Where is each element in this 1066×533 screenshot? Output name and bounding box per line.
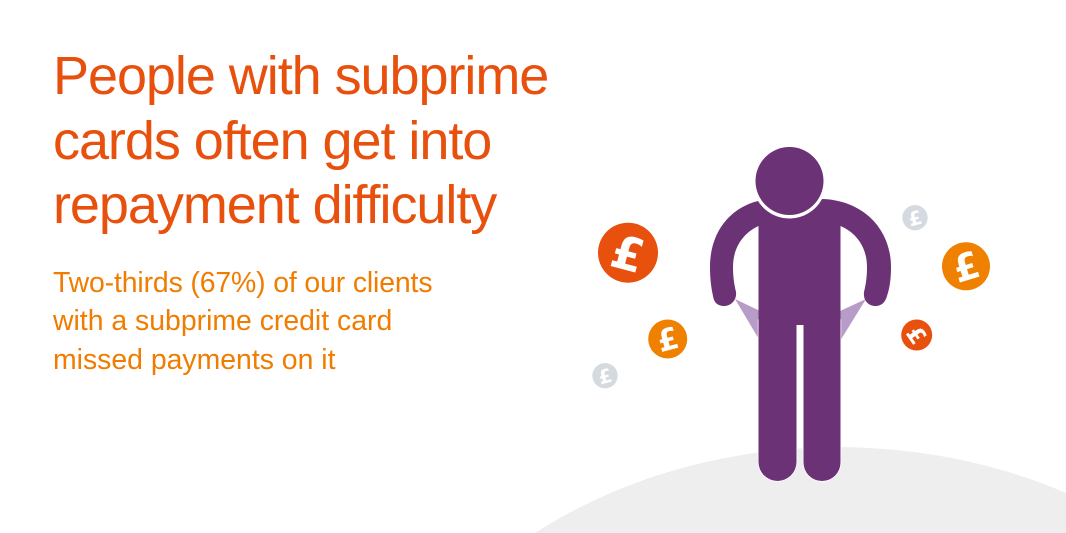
icon: empty right pocket xyxy=(840,299,866,341)
title: cards often get into xyxy=(53,110,491,170)
head xyxy=(756,147,824,215)
torso and arms xyxy=(710,199,891,325)
ground xyxy=(535,447,1066,533)
title: People with subprime xyxy=(53,46,548,106)
coin: small orange left: £ xyxy=(653,321,683,360)
coin: grey upper right xyxy=(902,205,928,231)
title xyxy=(53,46,548,235)
title: repayment difficulty xyxy=(53,175,496,235)
left leg xyxy=(758,320,796,481)
subtitle text xyxy=(53,266,432,376)
coin: large red: £ xyxy=(605,224,650,284)
coin: small red rotated: £ xyxy=(900,322,931,350)
right leg xyxy=(804,320,840,481)
coin: orange right: £ xyxy=(948,243,985,292)
coin: grey lower left xyxy=(592,363,618,389)
subtitle text: missed payments on it xyxy=(53,344,335,376)
figure: man xyxy=(710,147,891,481)
icon: empty left pocket xyxy=(735,299,760,341)
subtitle text: with a subprime credit card xyxy=(53,305,392,337)
coin: grey upper right: £ xyxy=(906,207,925,231)
coin: grey lower left: £ xyxy=(596,365,615,389)
subtitle text: Two-thirds (67%) of our clients xyxy=(53,266,432,298)
